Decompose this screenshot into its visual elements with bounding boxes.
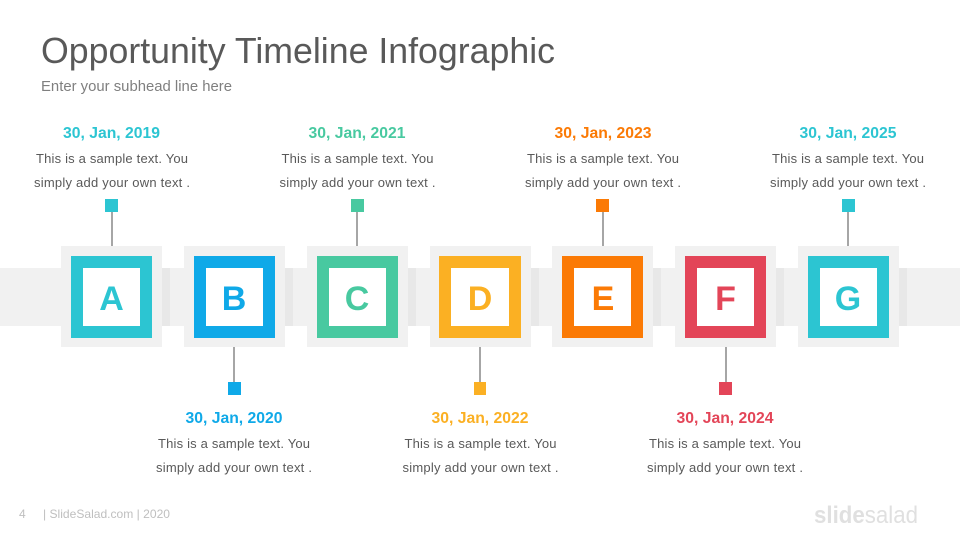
description E: This is a sample text. You bbox=[527, 151, 679, 166]
milestone D bbox=[402, 246, 558, 475]
tile E: E bbox=[592, 280, 614, 318]
logo wordmark: slidesalad bbox=[814, 502, 918, 529]
connector B bbox=[228, 347, 241, 395]
tile C: C bbox=[345, 280, 369, 318]
tile F bbox=[675, 246, 776, 347]
date D: 30, Jan, 2022 bbox=[432, 410, 529, 427]
date C: 30, Jan, 2021 bbox=[308, 125, 406, 142]
date A: 30, Jan, 2019 bbox=[63, 125, 160, 142]
tile D bbox=[430, 246, 531, 347]
description B: This is a sample text. You bbox=[158, 436, 310, 451]
description F: simply add your own text . bbox=[647, 460, 803, 475]
tile B: B bbox=[222, 280, 246, 318]
tile G bbox=[798, 246, 899, 347]
connector D bbox=[474, 347, 486, 395]
description A: This is a sample text. You bbox=[36, 151, 188, 166]
milestone C bbox=[280, 125, 436, 347]
description D: This is a sample text. You bbox=[404, 436, 556, 451]
subtitle: Enter your subhead line here bbox=[41, 78, 232, 95]
connector C bbox=[351, 199, 364, 246]
milestone B bbox=[156, 246, 312, 475]
milestone G bbox=[770, 125, 926, 347]
description B: simply add your own text . bbox=[156, 460, 312, 475]
description C: simply add your own text . bbox=[280, 175, 436, 190]
milestone F bbox=[647, 246, 803, 475]
description G: simply add your own text . bbox=[770, 175, 926, 190]
tile F: F bbox=[715, 280, 736, 318]
description A: simply add your own text . bbox=[34, 175, 190, 190]
date E: 30, Jan, 2023 bbox=[554, 125, 652, 142]
tile G: G bbox=[835, 280, 861, 318]
description G: This is a sample text. You bbox=[772, 151, 924, 166]
tile E bbox=[552, 246, 653, 347]
connector E bbox=[596, 199, 609, 246]
milestone E bbox=[525, 125, 681, 347]
page number: 4 bbox=[19, 507, 26, 521]
description C: This is a sample text. You bbox=[282, 151, 434, 166]
tile B bbox=[184, 246, 285, 347]
tile A: A bbox=[99, 280, 124, 318]
description F: This is a sample text. You bbox=[649, 436, 801, 451]
tile A bbox=[61, 246, 162, 347]
tile C bbox=[307, 246, 408, 347]
date G: 30, Jan, 2025 bbox=[800, 125, 897, 142]
description D: simply add your own text . bbox=[402, 460, 558, 475]
date F: 30, Jan, 2024 bbox=[676, 410, 774, 427]
connector G bbox=[842, 199, 855, 246]
title: Opportunity Timeline Infographic bbox=[41, 30, 555, 71]
footer text: | SlideSalad.com | 2020 bbox=[43, 507, 170, 521]
timeline band bbox=[0, 268, 960, 326]
milestone A bbox=[34, 125, 190, 347]
tile D: D bbox=[468, 280, 492, 318]
connector A bbox=[105, 199, 118, 246]
connector F bbox=[719, 347, 732, 395]
date B: 30, Jan, 2020 bbox=[186, 410, 283, 427]
description E: simply add your own text . bbox=[525, 175, 681, 190]
